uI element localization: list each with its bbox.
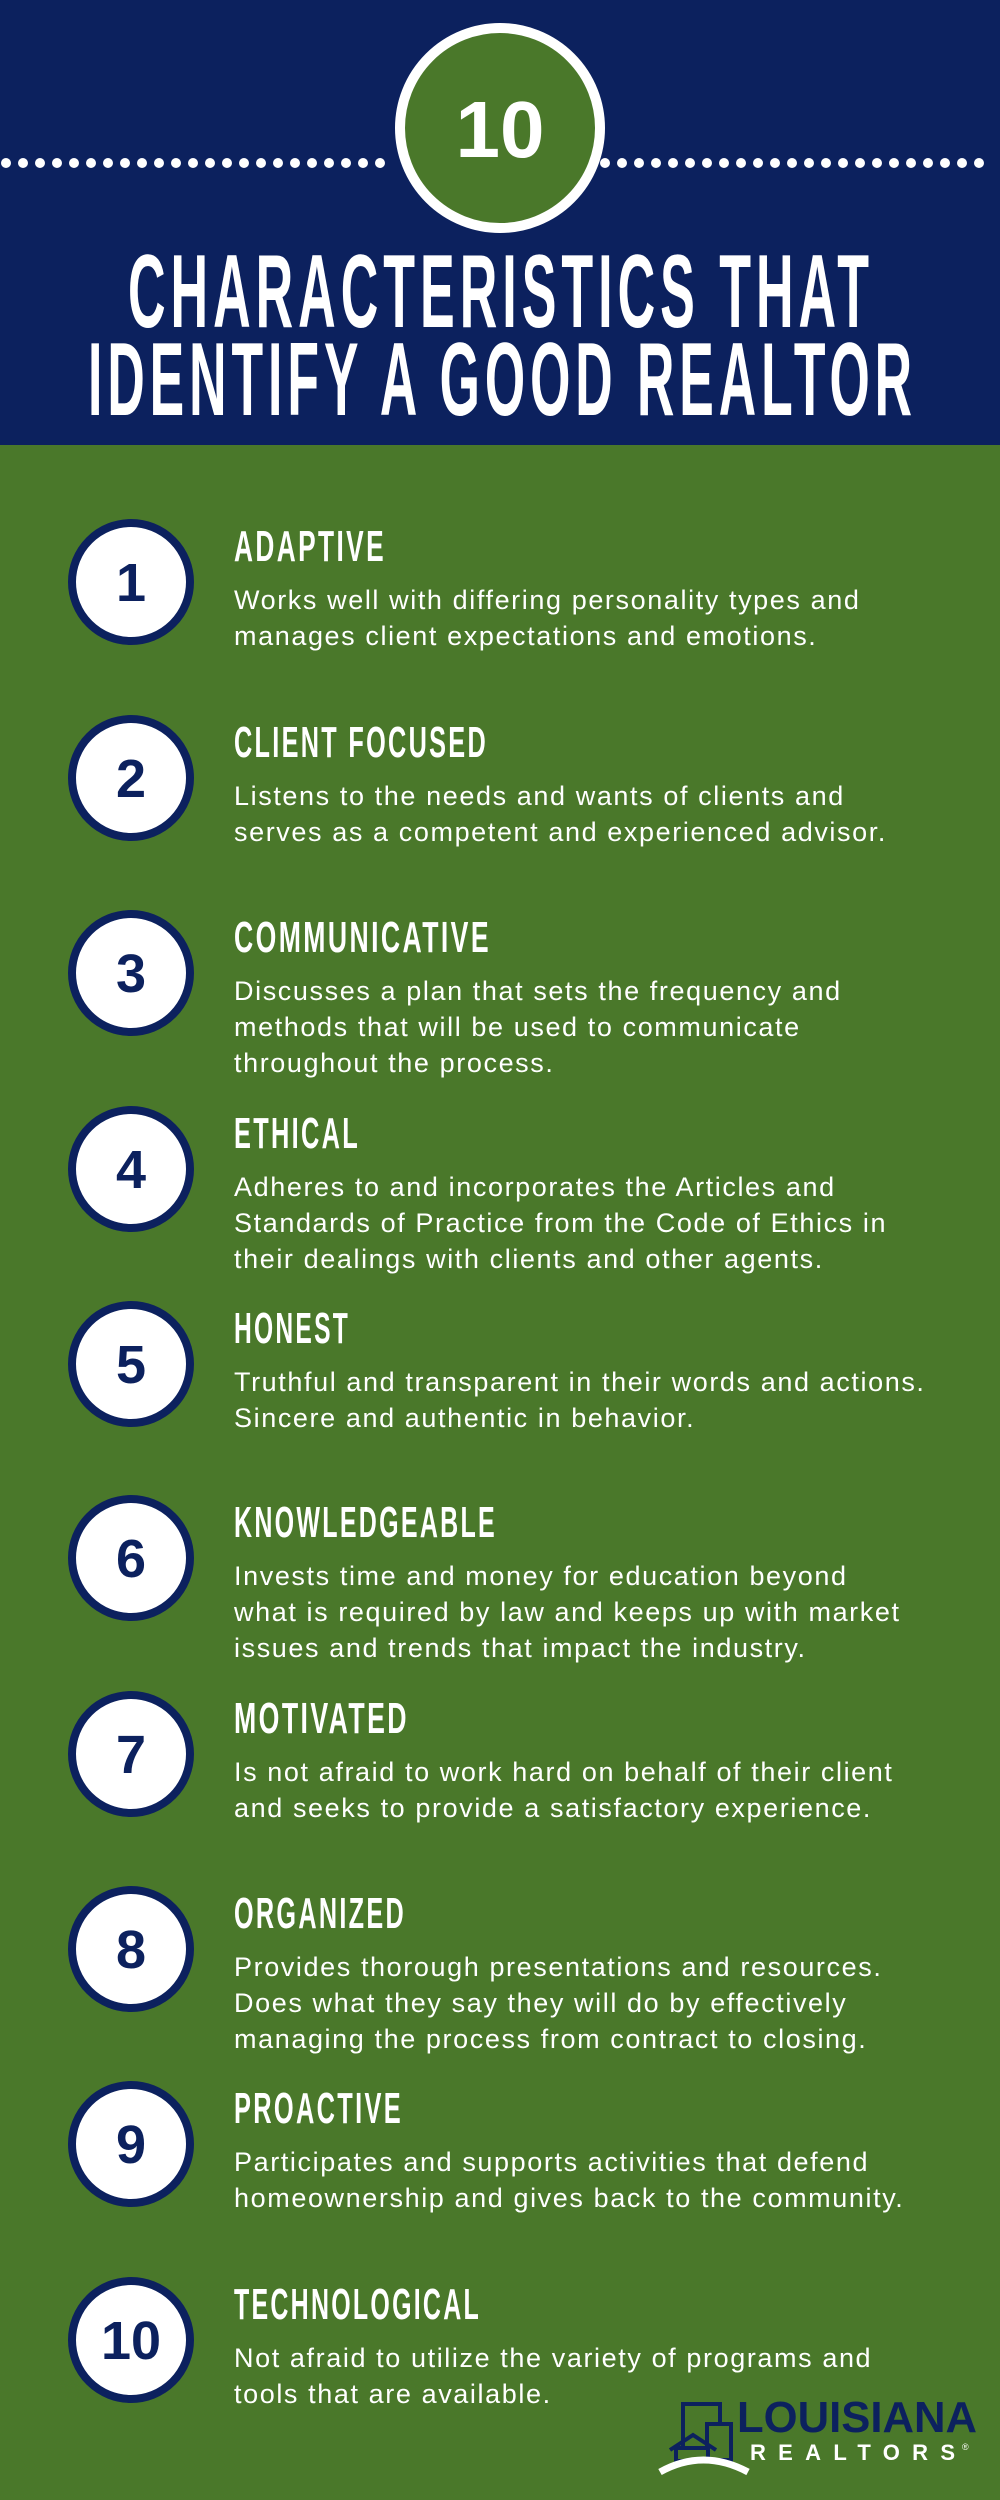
item 7	[72, 1694, 894, 1823]
logo: Louisiana Realtors: ®	[962, 2442, 969, 2452]
item 9: homeownership and gives back to the community.	[234, 2183, 904, 2213]
item 4: 4	[116, 1140, 146, 1200]
item 9: Participates and supports activities that defend	[234, 2147, 869, 2177]
logo: Louisiana Realtors: REALTORS	[750, 2440, 955, 2465]
item 5: 5	[116, 1335, 146, 1395]
badge: 10	[400, 28, 600, 228]
item 4: ETHICAL	[234, 1109, 360, 1158]
item 1: 1	[116, 553, 146, 613]
item 4: Adheres to and incorporates the Articles and	[234, 1172, 836, 1202]
item 7: 7	[116, 1725, 146, 1785]
item 10: 10	[101, 2311, 161, 2371]
item 5: Sincere and authentic in behavior.	[234, 1403, 695, 1433]
item 8: Does what they say they will do by effectively	[234, 1988, 847, 2018]
item 10: TECHNOLOGICAL	[234, 2280, 481, 2329]
item 9	[72, 2084, 904, 2213]
item 9: PROACTIVE	[234, 2084, 403, 2133]
item 3: throughout the process.	[234, 1048, 554, 1078]
item 4: their dealings with clients and other agents.	[234, 1244, 824, 1274]
item 9: 9	[116, 2115, 146, 2175]
logo: Louisiana Realtors	[660, 2393, 977, 2472]
item 8: managing the process from contract to closing.	[234, 2024, 867, 2054]
item 1: ADAPTIVE	[234, 522, 386, 571]
item 3: COMMUNICATIVE	[234, 913, 491, 962]
item 5: HONEST	[234, 1304, 350, 1353]
item 3	[72, 913, 842, 1078]
icon: buildings and house	[660, 2404, 748, 2472]
item 6: Invests time and money for education beyond	[234, 1561, 848, 1591]
item 3: Discusses a plan that sets the frequency and	[234, 976, 842, 1006]
item 6: issues and trends that impact the industry.	[234, 1633, 807, 1663]
item 5	[72, 1304, 926, 1433]
item 8: Provides thorough presentations and resources.	[234, 1952, 882, 1982]
logo: Louisiana Realtors: LOUISIANA	[737, 2393, 977, 2442]
title	[88, 234, 917, 438]
item 1: Works well with differing personality types and	[234, 585, 860, 615]
item 3: methods that will be used to communicate	[234, 1012, 801, 1042]
item 8: ORGANIZED	[234, 1889, 406, 1938]
item 2: Listens to the needs and wants of clients and	[234, 781, 845, 811]
item 8: 8	[116, 1920, 146, 1980]
item 6: KNOWLEDGEABLE	[234, 1498, 497, 1547]
item 10	[72, 2280, 872, 2409]
item 6: 6	[116, 1529, 146, 1589]
item 8	[72, 1889, 882, 2054]
item 3: 3	[116, 944, 146, 1004]
item 4	[72, 1109, 887, 1274]
item 2: serves as a competent and experienced advisor.	[234, 817, 887, 847]
badge: 10: 10	[456, 85, 544, 174]
item 10: tools that are available.	[234, 2379, 552, 2409]
item 5: Truthful and transparent in their words and actions.	[234, 1367, 926, 1397]
item 7: MOTIVATED	[234, 1694, 409, 1743]
item 1	[72, 522, 860, 651]
item 1: manages client expectations and emotions.	[234, 621, 817, 651]
item 2	[72, 718, 887, 847]
item 7: and seeks to provide a satisfactory experience.	[234, 1793, 872, 1823]
item 10: Not afraid to utilize the variety of programs and	[234, 2343, 872, 2373]
item 7: Is not afraid to work hard on behalf of their client	[234, 1757, 894, 1787]
item 6	[72, 1498, 901, 1663]
item 2: 2	[116, 749, 146, 809]
item 2: CLIENT FOCUSED	[234, 718, 488, 767]
header panel	[0, 0, 1000, 445]
item 4: Standards of Practice from the Code of Ethics in	[234, 1208, 887, 1238]
item 6: what is required by law and keeps up with market	[233, 1597, 901, 1627]
